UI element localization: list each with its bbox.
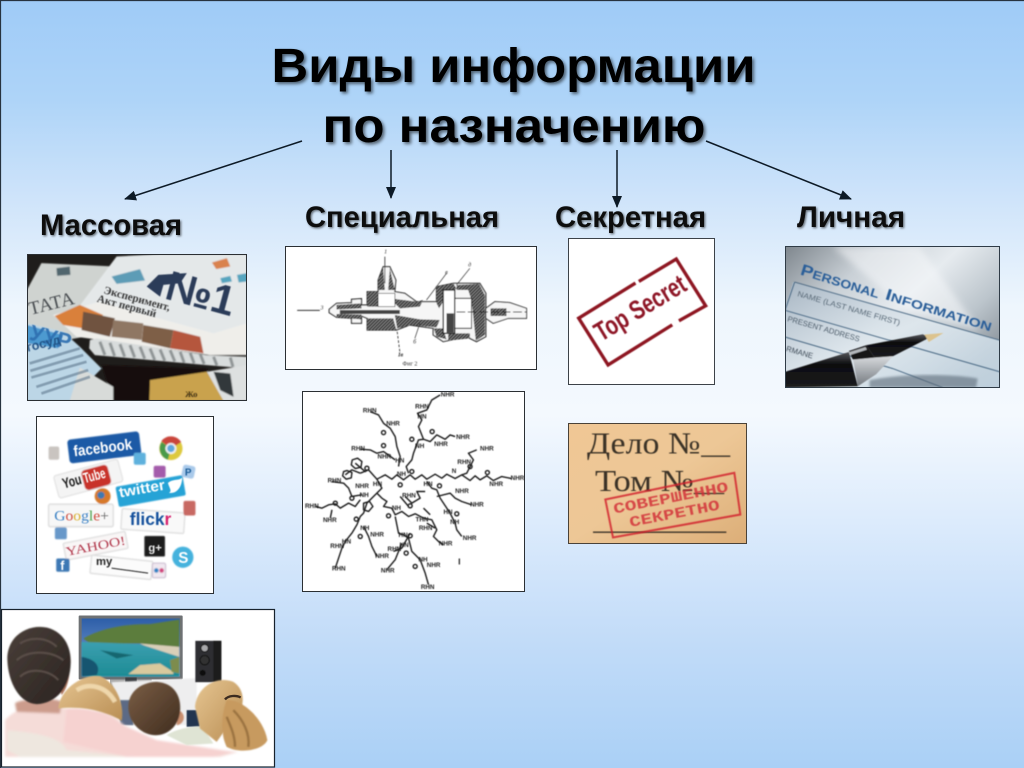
picture: personal information form with pen: INFORMATION [883, 287, 994, 335]
picture: personal information form with pen [785, 246, 1000, 388]
picture: dendrimer molecule diagram: NHR [439, 541, 453, 548]
picture: social networks: g+ [148, 543, 162, 555]
picture: dendrimer molecule diagram: NH [360, 525, 370, 532]
picture: social networks: Tube [82, 466, 108, 487]
picture: newspapers: госуд [25, 333, 62, 355]
tv screen [79, 616, 183, 688]
picture: dendrimer molecule diagram: NHR [378, 454, 392, 461]
picture: family watching TV [1, 609, 275, 767]
picture: dendrimer molecule diagram: HN [417, 413, 427, 420]
label: Специальная: Специальная [305, 201, 499, 234]
speaker [195, 641, 221, 682]
picture: Top Secret stamp [568, 238, 715, 385]
picture: personal information form with pen: RMANE [785, 344, 814, 360]
picture: dendrimer molecule diagram [302, 392, 525, 592]
picture: dendrimer molecule diagram: NHR [370, 531, 384, 538]
label: Личная: Личная [797, 201, 905, 234]
picture: personal information form with pen: PRESENT ADDRESS [786, 314, 861, 344]
picture: social networks [36, 416, 214, 594]
picture: social networks: facebook [73, 436, 134, 460]
boy [128, 682, 213, 745]
picture: dendrimer molecule diagram: RHN [415, 403, 429, 410]
picture: dendrimer molecule diagram: RHN [402, 492, 416, 499]
picture: secret case file: СОВЕРШЕННО [612, 480, 730, 518]
picture: engineering cross-section drawing: 1 [384, 249, 387, 255]
title: по назначению [322, 100, 706, 153]
picture: social networks: P [185, 468, 192, 479]
picture: dendrimer molecule diagram: RHN [351, 446, 365, 453]
picture: dendrimer molecule diagram: HN [373, 481, 382, 488]
picture: dendrimer molecule diagram: N [452, 468, 457, 475]
picture: dendrimer molecule diagram: NHR [323, 517, 337, 524]
picture: social networks: Google+ [54, 509, 109, 525]
picture: newspapers: Жо [185, 389, 198, 399]
picture: dendrimer molecule diagram: RHN [305, 503, 319, 510]
man [5, 627, 238, 757]
picture: dendrimer molecule diagram: RHN [457, 459, 472, 466]
title [272, 40, 756, 153]
woman with ponytail [195, 680, 267, 751]
picture: dendrimer molecule diagram: RHN [332, 565, 346, 572]
picture: dendrimer molecule diagram: NH [392, 505, 401, 512]
picture: social networks: You [61, 472, 83, 492]
picture: dendrimer molecule diagram: NHR [355, 483, 369, 490]
picture: dendrimer molecule diagram: HN [395, 458, 405, 465]
picture: dendrimer molecule diagram: NHR [434, 441, 448, 448]
label: Секретная: Секретная [555, 201, 706, 234]
picture: newspapers [25, 254, 247, 401]
picture: social networks: flickr [130, 509, 171, 529]
picture: dendrimer molecule diagram: HN [399, 532, 408, 539]
picture: dendrimer molecule diagram: NHR [456, 434, 470, 441]
picture: dendrimer molecule diagram: NH [360, 492, 369, 499]
blonde girl [58, 676, 122, 721]
picture: social networks: my [96, 556, 113, 568]
picture: dendrimer molecule diagram: NHR [375, 553, 389, 560]
picture: dendrimer molecule diagram: NH [397, 471, 406, 478]
picture: dendrimer molecule diagram: NH [415, 443, 425, 450]
picture: engineering cross-section drawing: 3 [320, 305, 324, 311]
picture: engineering cross-section drawing [286, 246, 536, 370]
picture: dendrimer molecule diagram: NHR [463, 535, 477, 542]
picture: dendrimer molecule diagram: HN [443, 509, 453, 516]
picture: social networks: S [178, 550, 188, 567]
picture: social networks: f [60, 559, 65, 573]
picture: dendrimer molecule diagram: NHR [427, 562, 441, 569]
picture: dendrimer molecule diagram: NHR [441, 392, 455, 399]
arrow: to Массовая [125, 141, 302, 199]
picture: engineering cross-section drawing: Ів [397, 353, 404, 359]
picture: dendrimer molecule diagram: NH [450, 519, 460, 526]
tv stand [112, 678, 197, 725]
picture: engineering cross-section drawing: б [413, 338, 417, 345]
picture: dendrimer molecule diagram: RHN [419, 525, 433, 532]
picture: dendrimer molecule diagram: NHR [470, 501, 484, 508]
picture: social networks: YAHOO! [65, 534, 127, 559]
picture: dendrimer molecule diagram: NHR [480, 446, 494, 453]
picture: dendrimer molecule diagram: HN [423, 481, 433, 488]
picture: newspapers: №1 [161, 262, 241, 325]
picture: engineering cross-section drawing: Фиг 2 [402, 361, 417, 367]
picture: dendrimer molecule diagram: HN [400, 542, 409, 549]
picture: dendrimer molecule diagram: HN [342, 539, 351, 546]
picture: dendrimer molecule diagram: RHN [328, 478, 342, 485]
label: Массовая: Массовая [40, 209, 182, 242]
picture: social networks: twitter [118, 478, 167, 501]
picture: secret case file [568, 424, 747, 544]
pen [785, 333, 943, 388]
picture: newspapers: Эксперимент, [102, 285, 172, 314]
picture: dendrimer molecule diagram: RHN [330, 543, 344, 550]
picture: personal information form with pen: PERSONAL [798, 262, 881, 302]
picture: dendrimer molecule diagram: RHN [421, 584, 435, 591]
picture: newspapers: УУР [27, 320, 74, 354]
picture: dendrimer molecule diagram: RHN [388, 546, 402, 553]
picture: dendrimer molecule diagram: NHR [511, 475, 525, 482]
arrow: to Личная [706, 141, 851, 199]
title: Виды информации [272, 40, 756, 93]
picture: dendrimer molecule diagram: NH [418, 556, 428, 563]
picture: engineering cross-section drawing: д [468, 262, 471, 269]
picture: secret case file: СЕКРЕТНО [628, 498, 722, 532]
picture: personal information form with pen: NAME (LAST NAME FIRST) [796, 289, 902, 327]
picture: secret case file: Том № [595, 464, 694, 498]
picture: dendrimer molecule diagram: NHR [381, 567, 395, 574]
picture: newspapers: Акт первый [96, 293, 158, 320]
picture: dendrimer molecule diagram: THN [415, 516, 429, 523]
picture: dendrimer molecule diagram: NHR [455, 488, 469, 495]
picture: engineering cross-section drawing: в [445, 270, 448, 276]
arrow: to Секретная [616, 150, 618, 207]
picture: secret case file: Дело № [587, 426, 700, 460]
picture: dendrimer molecule diagram: NHR [489, 481, 504, 488]
picture: dendrimer molecule diagram: I [458, 557, 461, 567]
picture: dendrimer molecule diagram: RHN [363, 408, 377, 415]
picture: newspapers: ТАТА [26, 288, 77, 320]
picture: dendrimer molecule diagram: NHR [386, 420, 400, 427]
arrow: to Специальная [390, 150, 392, 198]
